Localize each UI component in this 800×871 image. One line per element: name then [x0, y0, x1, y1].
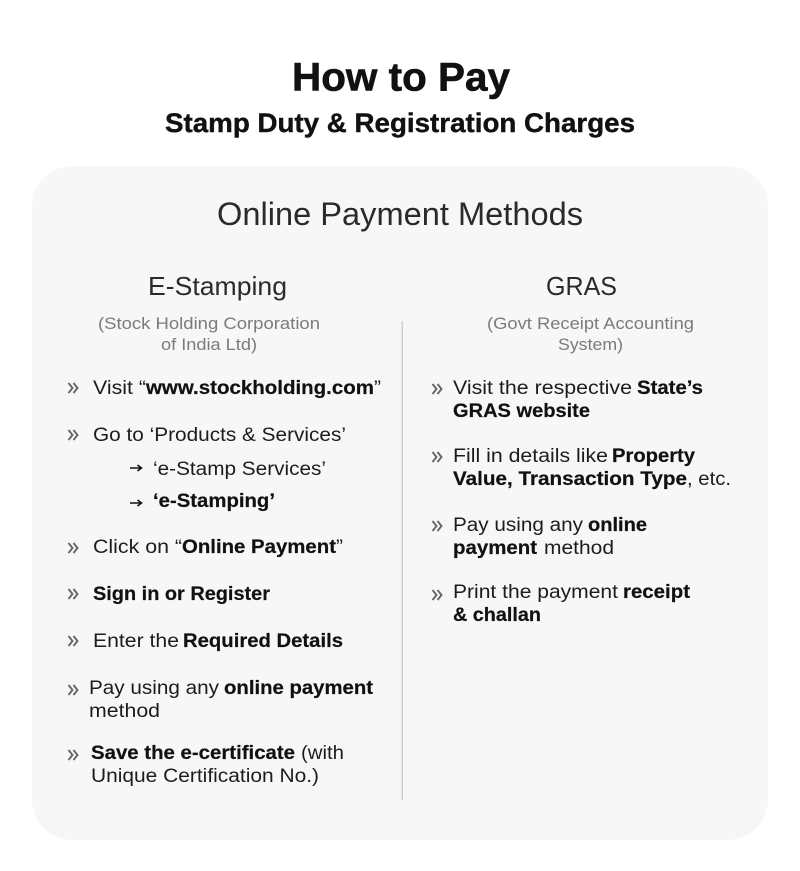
step: visit website: [68, 378, 381, 399]
sub-step: e-Stamp Services: ‘e-Stamp Services’: [153, 459, 326, 480]
step: online payment: ”: [336, 537, 343, 558]
step: sign in: Sign in or Register: [93, 584, 271, 605]
step: online payment: Online Payment: [182, 537, 337, 558]
step: visit GRAS website: GRAS website: [453, 401, 590, 422]
step: visit website: Visit “: [93, 378, 146, 399]
step: save certificate: Unique Certification No.): [91, 766, 319, 787]
column divider: [402, 321, 403, 800]
step: print receipt: Print the payment: [453, 582, 619, 603]
GRAS subheading: [487, 314, 694, 354]
step: required details: Enter the: [93, 631, 179, 652]
E-Stamping subheading: [98, 314, 320, 354]
step: pay online: [68, 678, 374, 722]
step: fill in details: Property: [612, 446, 695, 467]
step: online payment: [68, 537, 343, 558]
step: pay online: Pay using any: [89, 678, 220, 699]
sub-step: e-Stamping: ‘e-Stamping’: [153, 491, 275, 512]
step: visit website: www.stockholding.com: [145, 378, 374, 399]
column: E-Stamping: [68, 271, 381, 787]
step: visit GRAS website: State’s: [637, 378, 703, 399]
step: required details: Required Details: [183, 631, 343, 652]
step: save certificate: (with: [301, 743, 344, 764]
step: required details: [68, 631, 343, 652]
GRAS subheading: System): [558, 335, 623, 354]
E-Stamping subheading: of India Ltd): [161, 335, 257, 354]
step: visit GRAS website: Visit the respective: [453, 378, 632, 399]
step: fill in details: Fill in details like: [453, 446, 608, 467]
column: GRAS: [432, 271, 731, 626]
E-Stamping heading: E-Stamping: [148, 271, 287, 301]
step: fill in details: [432, 446, 731, 490]
step: pay online: method: [89, 701, 160, 722]
step: save certificate: Save the e-certificate: [91, 743, 295, 764]
step: print receipt: [432, 582, 691, 626]
subtitle: Stamp Duty & Registration Charges: [165, 108, 635, 138]
title: How to Pay: [292, 56, 511, 100]
step: online payment: Click on “: [93, 537, 182, 558]
step: save certificate: [68, 743, 344, 787]
step: fill in details: , etc.: [687, 469, 731, 490]
GRAS heading: GRAS: [546, 271, 617, 301]
step: pay online: method: [544, 538, 614, 559]
GRAS subheading: (Govt Receipt Accounting: [487, 314, 694, 333]
step: pay online: payment: [453, 538, 538, 559]
step: pay online: online: [588, 515, 647, 536]
title: [165, 56, 635, 138]
step: visit GRAS website: [432, 378, 703, 422]
step: pay online: Pay using any: [453, 515, 584, 536]
step: fill in details: Value, Transaction Type: [453, 469, 687, 490]
step: print receipt: receipt: [623, 582, 691, 603]
step: pay online: [432, 515, 647, 559]
panel: online payment methods: [32, 166, 768, 840]
step: visit website: ”: [374, 378, 381, 399]
step: pay online: online payment: [224, 678, 374, 699]
panel heading: Online Payment Methods: [217, 196, 583, 232]
step: products and services: Go to ‘Products & Services’: [93, 425, 346, 446]
step: print receipt: & challan: [453, 605, 541, 626]
E-Stamping subheading: (Stock Holding Corporation: [98, 314, 320, 333]
